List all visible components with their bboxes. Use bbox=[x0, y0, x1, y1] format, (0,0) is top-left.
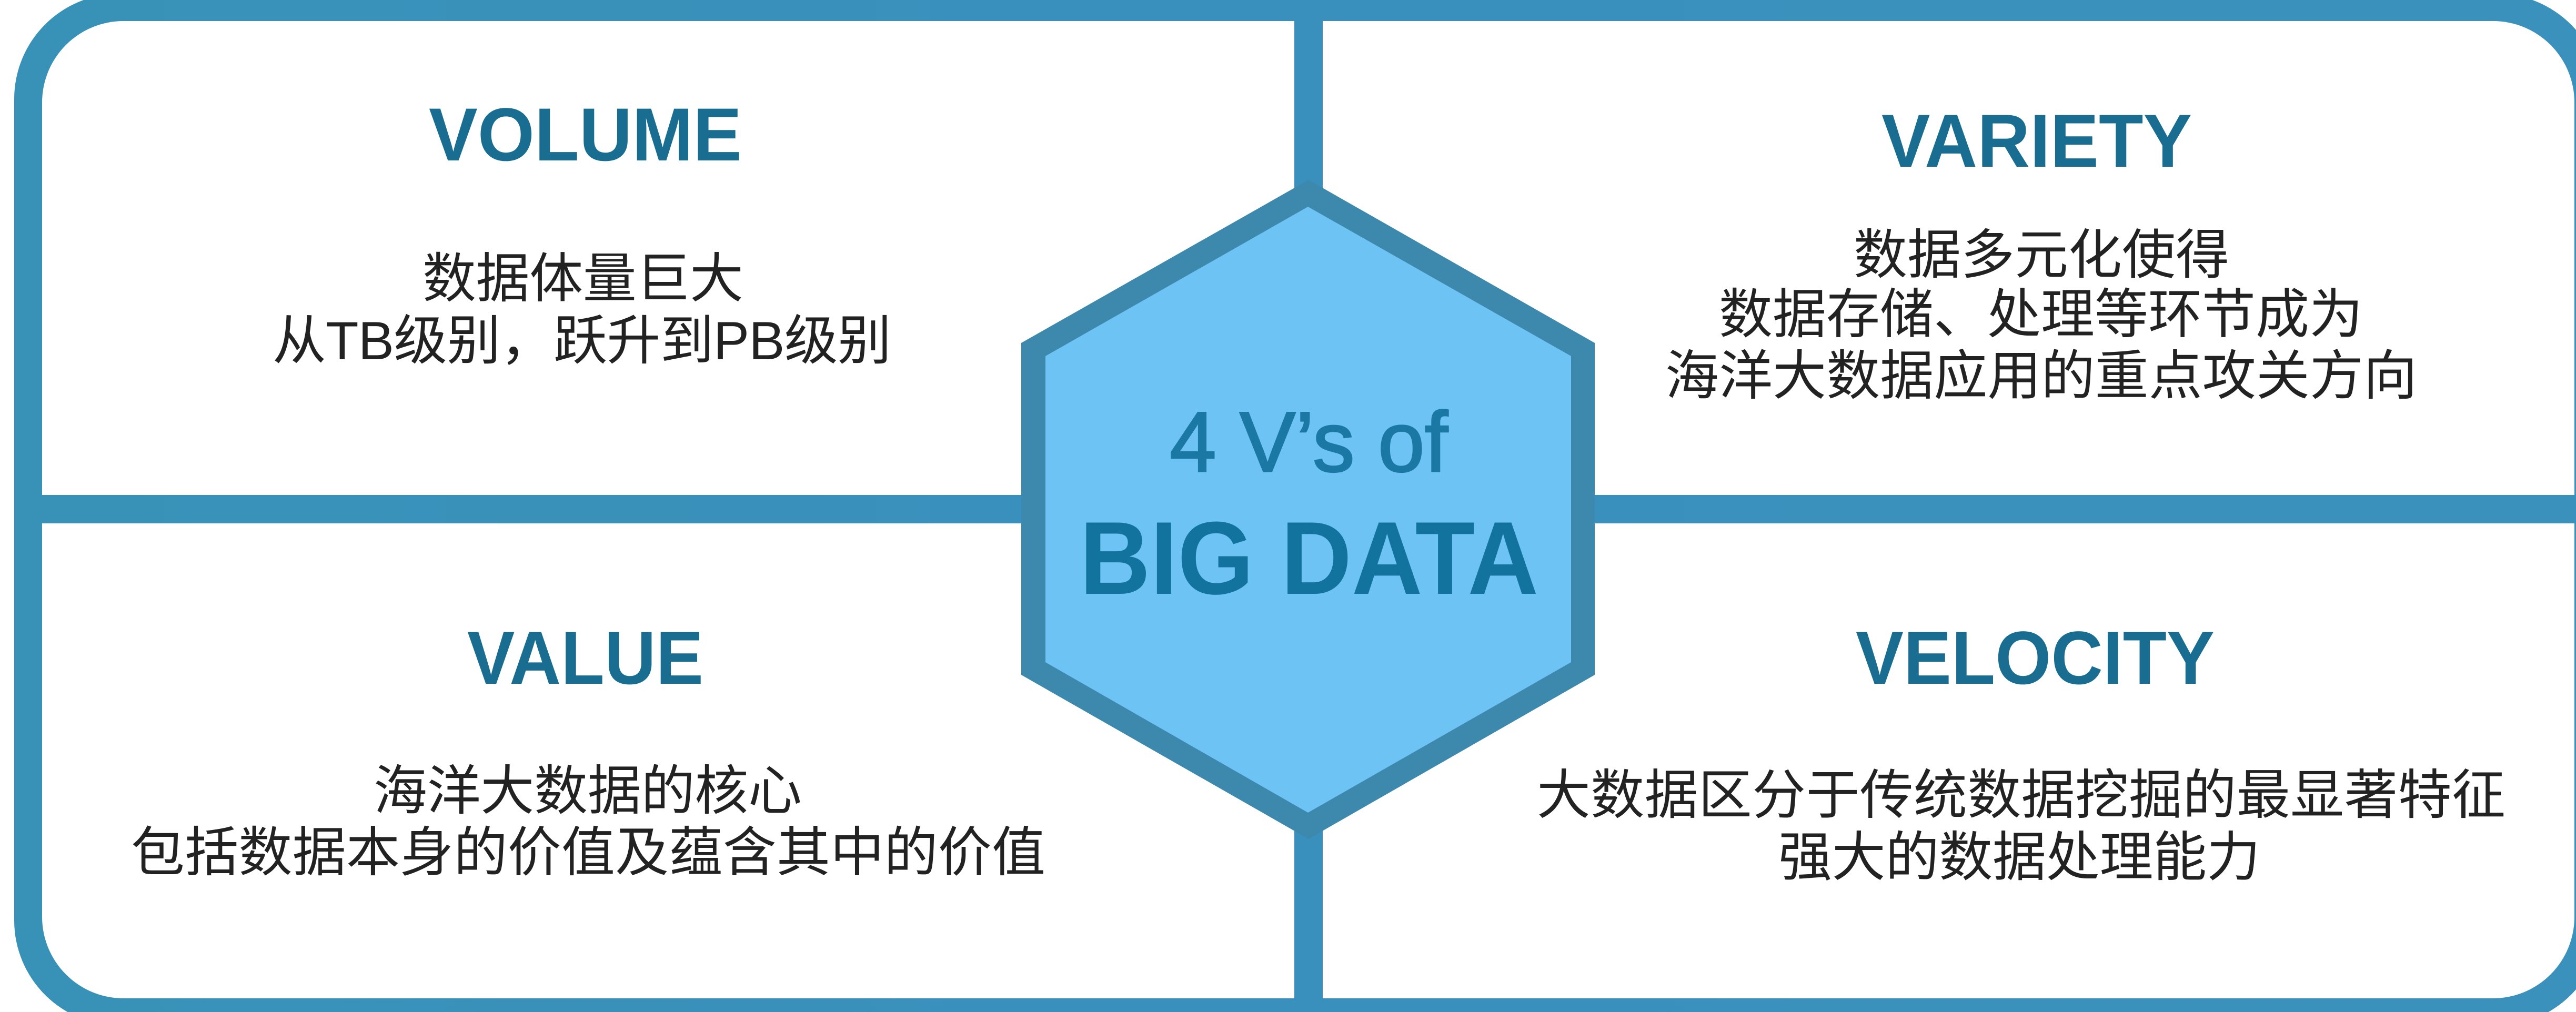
text block: variety description: 数据存储、处理等环节成为 bbox=[1719, 285, 2363, 345]
text block: variety description: 数据多元化使得 bbox=[1854, 225, 2229, 285]
text block: variety description: 海洋大数据应用的重点攻关方向 bbox=[1665, 346, 2417, 406]
text block: volume description bbox=[273, 249, 891, 371]
central hexagon bbox=[1021, 180, 1595, 839]
heading: velocity: VELOCITY bbox=[1856, 616, 2215, 700]
hexagon title: big data: BIG DATA bbox=[1080, 500, 1538, 616]
panel: velocity bbox=[1323, 523, 2574, 998]
panel: value bbox=[42, 523, 1294, 998]
text block: volume description: 从TB级别，跃升到PB级别 bbox=[273, 311, 891, 371]
text block: variety description bbox=[1665, 225, 2417, 406]
heading: volume: VOLUME bbox=[429, 93, 742, 177]
text block: value description: 包括数据本身的价值及蕴含其中的价值 bbox=[131, 823, 1045, 883]
text block: velocity description: 强大的数据处理能力 bbox=[1778, 827, 2260, 887]
panel: volume bbox=[42, 21, 1294, 495]
text block: value description bbox=[131, 761, 1045, 883]
text block: velocity description bbox=[1537, 765, 2505, 887]
text block: value description: 海洋大数据的核心 bbox=[374, 761, 802, 821]
text block: velocity description: 大数据区分于传统数据挖掘的最显著特征 bbox=[1537, 765, 2505, 825]
text block: volume description: 数据体量巨大 bbox=[422, 249, 743, 309]
panel: variety bbox=[1323, 21, 2574, 495]
heading: value: VALUE bbox=[467, 616, 703, 700]
hexagon title: 4 V's of: 4 V’s of bbox=[1170, 394, 1448, 490]
heading: variety: VARIETY bbox=[1881, 99, 2192, 183]
